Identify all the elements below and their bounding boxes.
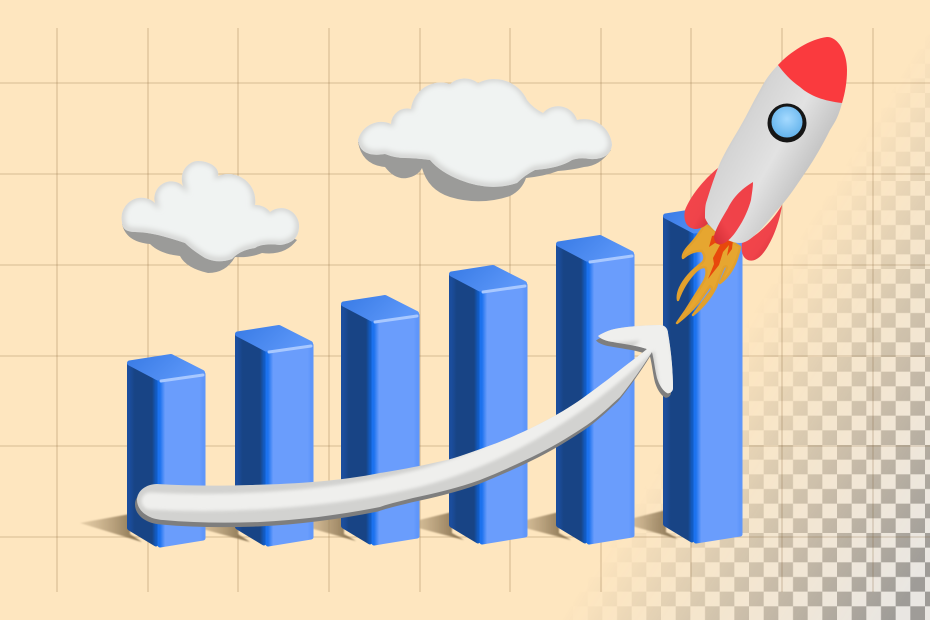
small cloud shadow <box>122 200 297 273</box>
growth arrow <box>135 325 673 527</box>
bar 2 <box>238 328 311 544</box>
bar 4 <box>452 268 525 542</box>
right fin <box>742 205 782 261</box>
left fin <box>684 168 718 229</box>
rocket <box>677 37 847 323</box>
rocket window <box>768 104 806 142</box>
rocket body <box>705 37 847 243</box>
bar 6 <box>666 210 740 541</box>
bar shadows <box>80 510 678 542</box>
transparency checkerboard <box>590 74 930 620</box>
large cloud shadow <box>358 120 611 201</box>
flame outer <box>677 224 740 323</box>
small cloud <box>122 160 299 273</box>
rocket nose <box>778 37 847 103</box>
flame inner <box>708 234 733 279</box>
bar 5 <box>558 238 632 542</box>
large cloud <box>358 77 612 201</box>
bar 3 <box>344 298 417 543</box>
centre fin <box>714 182 753 244</box>
bar 1 <box>130 356 203 545</box>
